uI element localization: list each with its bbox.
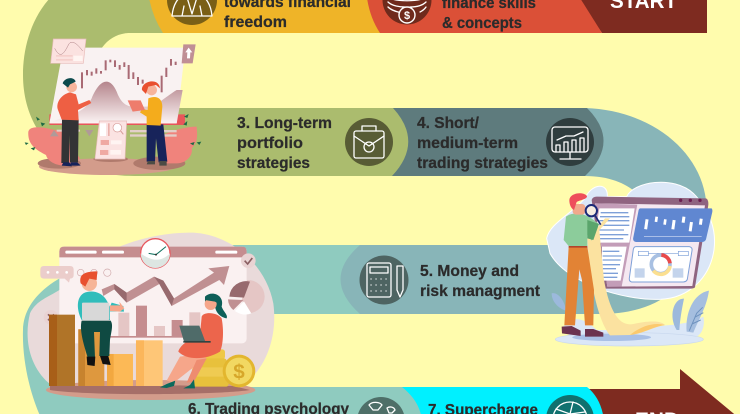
text: step 1 label: freedom [224, 14, 287, 31]
up arrow card [182, 44, 196, 63]
icon: calculator and pencil [360, 256, 408, 304]
path and band: light teal curve with steps 5 and 6 [23, 245, 422, 414]
arrow: end [585, 369, 740, 414]
icon: trading chart monitor [546, 118, 594, 166]
icon: briefcase with dollar [345, 118, 393, 166]
icon: brain head [357, 397, 405, 414]
text: step 4 label: 4. Short/ [417, 115, 480, 132]
text: step 2 label: & concepts [442, 15, 522, 32]
text: step 4 label: medium-term [417, 135, 518, 152]
man with laptop [78, 271, 124, 366]
man with magnifier [562, 193, 603, 337]
long paper scroll [587, 218, 665, 335]
band: step 2 finance skills [360, 0, 602, 33]
stack of coins [191, 349, 255, 387]
text: step 3 label: strategies [237, 155, 310, 172]
illustration: two people with growth chart and coins [28, 233, 274, 400]
pie chart [228, 280, 265, 314]
dashboard window [592, 197, 712, 289]
text: step 4 label: trading strategies [417, 155, 548, 172]
text: step 3 label: portfolio [237, 135, 303, 152]
woman in yellow sweater [128, 81, 167, 166]
band: step 7 supercharge [395, 387, 604, 414]
illustration: man reading long report at dashboard [547, 182, 715, 346]
man in red sweater [57, 78, 91, 166]
icon: handshake suit [167, 0, 217, 25]
document card [93, 121, 128, 162]
dashboard window [59, 247, 247, 343]
text: step 5 label: 5. Money and [420, 263, 519, 280]
check badge [241, 253, 256, 268]
illustration: two analysts at candlestick board [25, 39, 201, 175]
orange bars [49, 315, 163, 386]
text: step 5 label: risk managment [420, 283, 541, 300]
speech bubble [40, 266, 74, 283]
woman with laptop [160, 294, 227, 388]
clock [141, 239, 170, 268]
icon: coin stack [382, 0, 432, 24]
left plant [552, 293, 566, 311]
text: step 3 label: 3. Long-term [237, 115, 332, 132]
right plants [672, 291, 709, 333]
path: teal curve from step 4 to step 5 [340, 108, 706, 314]
stack of coins: $ [233, 361, 245, 384]
icon: pie target [546, 395, 594, 414]
path and band: green curve with step 3 [23, 0, 408, 176]
bar chart [110, 306, 210, 338]
icon: coin stack: $ [404, 10, 410, 22]
small sine chart card [51, 39, 86, 63]
cross badge [44, 310, 58, 325]
growth arrow [102, 266, 229, 306]
band: step 4 short and medium term [380, 108, 604, 176]
band: step 1 financial freedom [149, 0, 380, 33]
ground [555, 317, 704, 346]
band: start arrow block [570, 0, 707, 33]
